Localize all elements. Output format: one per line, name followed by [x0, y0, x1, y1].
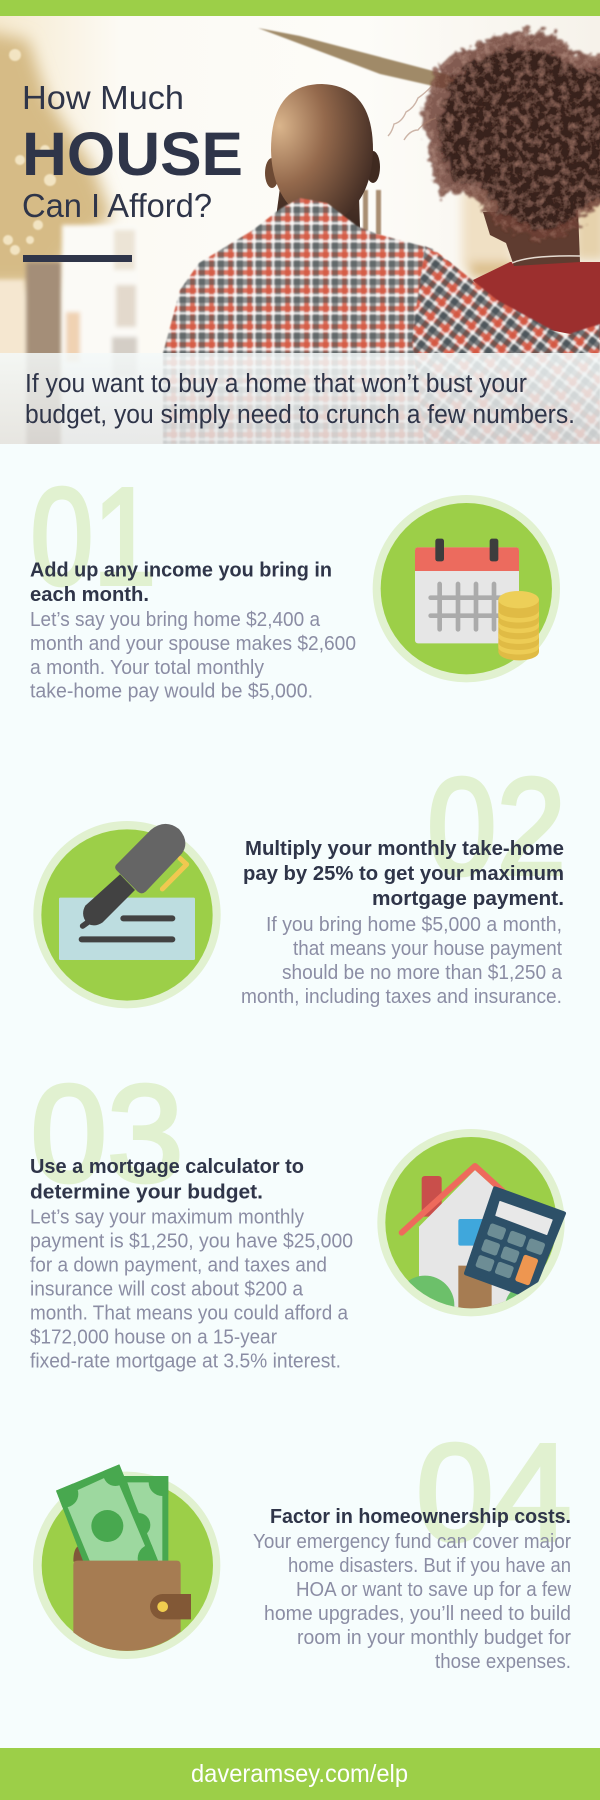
- step 2 heading: pay by 25% to get your maximum: [243, 862, 564, 885]
- top green bar: [0, 0, 600, 16]
- title rule: [23, 255, 132, 262]
- intro band: [0, 353, 600, 444]
- step 2 heading: mortgage payment.: [372, 887, 564, 910]
- woman's red top: [473, 262, 600, 340]
- footer bar: [0, 1748, 600, 1800]
- blurred roof line: [258, 28, 460, 92]
- warm building behind couple: [462, 190, 600, 278]
- step 1 heading: each month.: [30, 583, 149, 606]
- step 4 body: those expenses.: [435, 1651, 571, 1673]
- icon: pen signing a check: [33, 821, 221, 1008]
- step 2 body: If you bring home $5,000 a month,: [266, 914, 562, 936]
- step 3: [30, 1057, 565, 1372]
- bottom shade: [0, 353, 600, 444]
- hair outer fringe: [422, 31, 600, 239]
- step 1 heading: Add up any income you bring in: [30, 558, 332, 582]
- step 4 heading: Factor in homeownership costs.: [270, 1505, 571, 1528]
- title line: How Much: How Much: [22, 79, 184, 116]
- step 3 body: payment is $1,250, you have $25,000: [30, 1230, 353, 1252]
- footer background: [0, 1748, 600, 1800]
- step 1 body: take-home pay would be $5,000.: [30, 680, 313, 702]
- step 3 heading: determine your budget.: [30, 1180, 263, 1204]
- step number 04: 04: [416, 1416, 572, 1570]
- title line: Can I Afford?: Can I Afford?: [22, 187, 212, 224]
- step 3 body: fixed-rate mortgage at 3.5% interest.: [30, 1350, 341, 1372]
- hair mass: [438, 48, 600, 228]
- step 2 heading: Multiply your monthly take-home: [245, 837, 564, 860]
- blurred wall, tree trunk and side column: [0, 262, 62, 452]
- step 4: [33, 1442, 571, 1672]
- hero photo: couple looking at a house: [0, 16, 600, 452]
- man's head: [271, 84, 373, 215]
- step 2 body: month, including taxes and insurance.: [241, 986, 562, 1008]
- step 3 body: insurance will cost about $200 a: [30, 1278, 304, 1300]
- step 2 body: should be no more than $1,250 a: [282, 962, 563, 984]
- title line: HOUSE: HOUSE: [22, 120, 243, 188]
- step 2: [33, 750, 566, 1008]
- icon: calendar and coins: [373, 495, 560, 682]
- icon: wallet with cash: [33, 1462, 220, 1659]
- man's arm around woman: [412, 246, 600, 444]
- step 3 body: $172,000 house on a 15-year: [30, 1326, 277, 1348]
- icon: house and calculator: [377, 1129, 565, 1334]
- step 3 body: Let’s say your maximum monthly: [30, 1206, 304, 1228]
- blurred golden tree: [0, 30, 112, 285]
- step 3 body: for a down payment, and taxes and: [30, 1254, 327, 1276]
- step 4 body: home upgrades, you’ll need to build: [264, 1603, 571, 1625]
- intro text: budget, you simply need to crunch a few numbers.: [25, 401, 575, 429]
- step 1 body: a month. Your total monthly: [30, 657, 264, 679]
- woman's curly hair: [388, 31, 600, 239]
- step 1: [30, 460, 560, 702]
- blurred house wall and windows: [59, 222, 139, 353]
- step 4 body: home disasters. But if you have an: [288, 1555, 571, 1577]
- step number 02: 02: [427, 750, 566, 904]
- woman's neck and face: [483, 210, 580, 266]
- step 4 body: HOA or want to save up for a few: [296, 1579, 572, 1601]
- intro text: If you want to buy a home that won’t bust your: [25, 370, 527, 398]
- title: [22, 79, 243, 262]
- curly wisps: [388, 86, 436, 140]
- man's plaid shirt: [163, 198, 470, 444]
- step number 03: 03: [30, 1057, 184, 1211]
- translucent band: [0, 353, 600, 444]
- man's ears: [265, 151, 380, 188]
- step 4 body: room in your monthly budget for: [297, 1627, 571, 1649]
- man's neck: [276, 190, 360, 228]
- window posts: [363, 190, 381, 235]
- step 1 body: Let’s say you bring home $2,400 a: [30, 609, 321, 631]
- step 1 body: month and your spouse makes $2,600: [30, 633, 356, 655]
- bokeh lights: [3, 49, 56, 255]
- step 3 body: month. That means you could afford a: [30, 1302, 349, 1324]
- footer url: daveramsey.com/elp: [191, 1760, 408, 1788]
- necklace: [512, 256, 580, 263]
- step 2 body: that means your house payment: [293, 938, 562, 960]
- photo backdrop: [0, 16, 600, 353]
- step 4 body: Your emergency fund can cover major: [253, 1531, 571, 1553]
- step 3 heading: Use a mortgage calculator to: [30, 1155, 304, 1178]
- step number 01: 01: [30, 460, 156, 614]
